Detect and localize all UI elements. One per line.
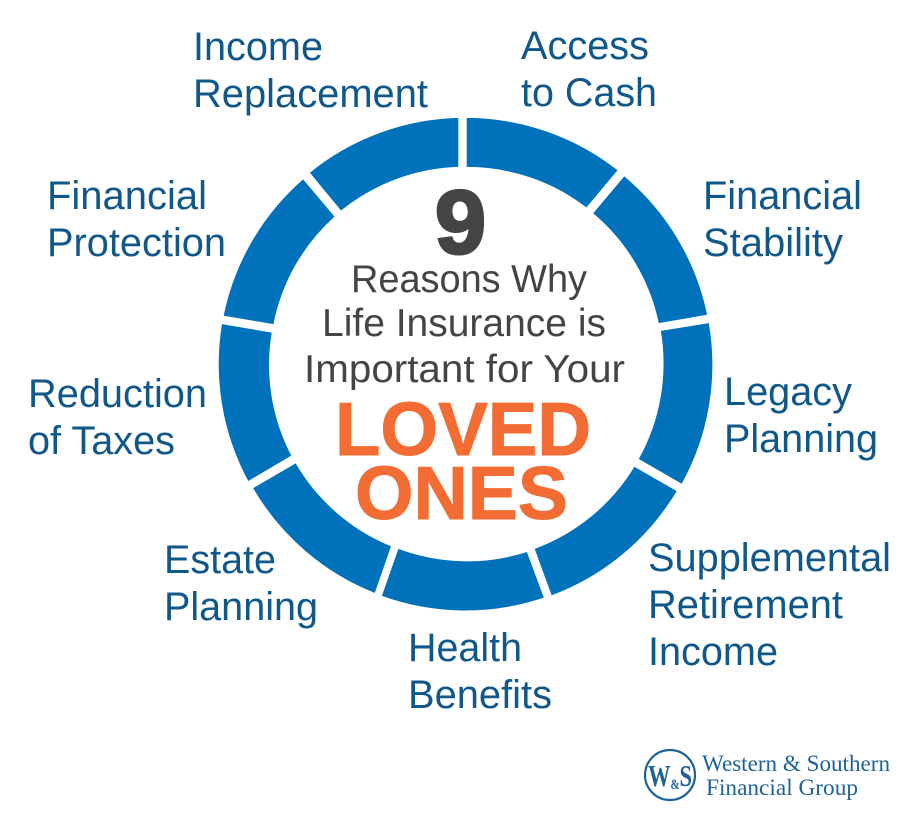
logo wordmark: Western & Southern	[702, 751, 890, 777]
label: access to cash	[521, 24, 657, 115]
label: income replacement: Replacement	[193, 72, 428, 116]
segment: financial stability	[593, 176, 707, 323]
label: reduction of taxes	[28, 372, 207, 463]
logo wordmark: Financial Group	[706, 775, 858, 801]
label: financial stability: Stability	[703, 221, 843, 265]
ring chart of nine segments	[219, 118, 712, 610]
label: financial protection	[47, 174, 226, 265]
highlight: loved: LOVED	[335, 387, 591, 471]
label: supplemental retirement income: Supplemental	[648, 536, 891, 580]
label: supplemental retirement income: Income	[648, 630, 778, 674]
label: health benefits	[408, 626, 552, 717]
logo wordmark	[702, 751, 890, 801]
label: financial stability: Financial	[703, 174, 862, 218]
segment: supplemental retirement income	[535, 467, 677, 595]
logo: western and southern financial group	[645, 750, 890, 801]
icon: W&S monogram	[645, 750, 695, 800]
label: supplemental retirement income	[648, 536, 891, 674]
segment: legacy planning	[639, 323, 712, 484]
numeral 9: 9	[435, 173, 486, 273]
label: access to cash: to Cash	[521, 71, 657, 115]
label: financial protection: Financial	[47, 174, 207, 218]
segment: income replacement	[310, 118, 458, 210]
highlight: ones: ONES	[355, 451, 568, 535]
segment: financial protection	[224, 179, 334, 324]
label: financial stability	[703, 174, 862, 265]
label: reduction of taxes: of Taxes	[28, 419, 175, 463]
heading line: life insurance is: Life Insurance is	[322, 302, 606, 345]
segment: access to cash	[467, 118, 618, 208]
segment: health benefits	[382, 549, 544, 610]
segment: estate planning	[253, 463, 391, 593]
heading line: important for your: Important for Your	[304, 348, 625, 391]
icon: W&S monogram: W	[648, 758, 679, 793]
center heading	[304, 173, 625, 535]
heading line: reasons why: Reasons Why	[351, 258, 587, 301]
label: estate planning: Estate	[164, 538, 276, 582]
label: financial protection: Protection	[47, 221, 226, 265]
label: health benefits: Health	[408, 626, 522, 670]
label: estate planning	[164, 538, 318, 629]
icon: W&S monogram: &	[670, 777, 680, 793]
icon: W&S monogram: S	[680, 758, 692, 793]
label: access to cash: Access	[521, 24, 649, 68]
label: health benefits: Benefits	[408, 673, 552, 717]
label: income replacement	[193, 25, 428, 116]
segment: reduction of taxes	[219, 324, 291, 481]
label: income replacement: Income	[193, 25, 323, 69]
label: estate planning: Planning	[164, 585, 318, 629]
label: supplemental retirement income: Retirement	[648, 583, 843, 627]
label: legacy planning: Legacy	[724, 370, 852, 414]
label: reduction of taxes: Reduction	[28, 372, 207, 416]
label: legacy planning: Planning	[724, 417, 878, 461]
label: legacy planning	[724, 370, 878, 461]
